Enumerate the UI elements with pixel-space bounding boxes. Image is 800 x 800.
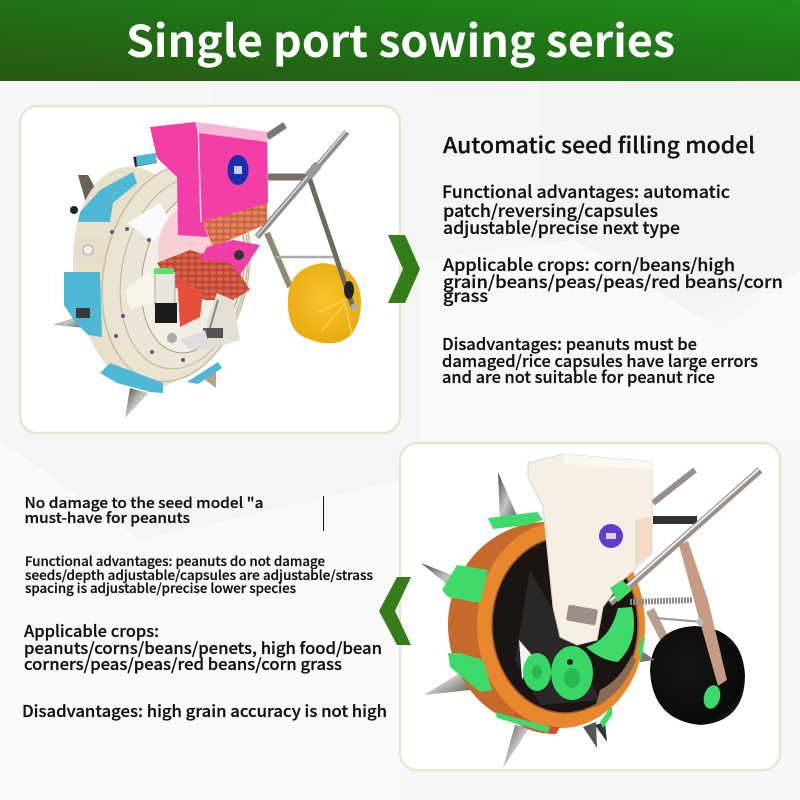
illustration: green brackets <box>442 512 645 733</box>
panel: no damage seed machine photo <box>400 443 780 770</box>
illustration: spikes <box>421 472 655 768</box>
applicable crops <box>24 618 382 675</box>
functional advantages: Functional advantages: automatic <box>442 178 730 203</box>
heading: Automatic seed filling model <box>443 128 755 160</box>
arrow: points right <box>388 235 420 303</box>
functional advantages: spacing is adjustable/precise lower species <box>25 578 296 597</box>
applicable crops: Applicable crops: corn/beans/high <box>443 251 735 276</box>
disadvantages <box>442 331 758 388</box>
illustration: main rod <box>257 131 347 237</box>
disadvantages: and are not suitable for peanut rice <box>442 364 715 388</box>
heading <box>24 492 264 528</box>
functional advantages: patch/reversing/capsules <box>443 197 658 222</box>
panel: automatic seed filling machine photo <box>20 106 400 433</box>
heading: must-have for peanuts <box>24 507 190 528</box>
applicable crops: corners/peas/peas/red beans/corn grass <box>24 651 342 675</box>
illustration: black press wheel <box>650 541 745 725</box>
illustration: pink hopper <box>150 122 268 275</box>
illustration: orange seed disc <box>448 522 645 734</box>
functional advantages: adjustable/precise next type <box>443 214 680 239</box>
functional advantages <box>442 178 730 239</box>
illustration: seed disc body <box>59 150 269 398</box>
disadvantages: Disadvantages: peanuts must be <box>442 331 697 355</box>
title: Single port sowing series <box>126 6 675 70</box>
illustration: blue brackets <box>64 153 222 393</box>
applicable crops: peanuts/corns/beans/penets, high food/bean <box>24 635 382 659</box>
icon: purple sticker <box>599 524 623 548</box>
applicable crops <box>443 251 783 307</box>
illustration: main rod and spring <box>610 469 760 603</box>
illustration: spikes <box>53 153 216 418</box>
illustration: green discs <box>523 646 593 700</box>
arrow: points left <box>379 577 411 645</box>
text block: no damage to the seed model <box>22 492 387 722</box>
functional advantages: Functional advantages: peanuts do not damage <box>25 551 325 570</box>
illustration: rods and frame <box>267 125 334 287</box>
functional advantages <box>25 551 373 597</box>
text cursor line <box>322 496 324 531</box>
applicable crops: grass <box>443 282 488 307</box>
illustration: yellow press wheel <box>288 180 361 343</box>
disadvantages: Disadvantages: high grain accuracy is not high <box>22 698 387 722</box>
icon: blue sticker <box>228 155 248 185</box>
text block: automatic seed filling model <box>442 128 783 388</box>
functional advantages: seeds/depth adjustable/capsules are adjustable/strass <box>25 565 373 584</box>
illustration: seed window with red disc <box>154 206 250 350</box>
header banner <box>0 0 800 81</box>
applicable crops: grain/beans/peas/peas/red beans/corn <box>443 268 783 293</box>
heading: No damage to the seed model "a <box>24 492 264 513</box>
illustration: green half disc <box>586 607 634 662</box>
illustration: translucent hopper <box>528 454 652 645</box>
disadvantages: damaged/rice capsules have large errors <box>442 348 758 372</box>
applicable crops: Applicable crops: <box>24 618 159 642</box>
illustration: rods and frame <box>650 470 703 640</box>
